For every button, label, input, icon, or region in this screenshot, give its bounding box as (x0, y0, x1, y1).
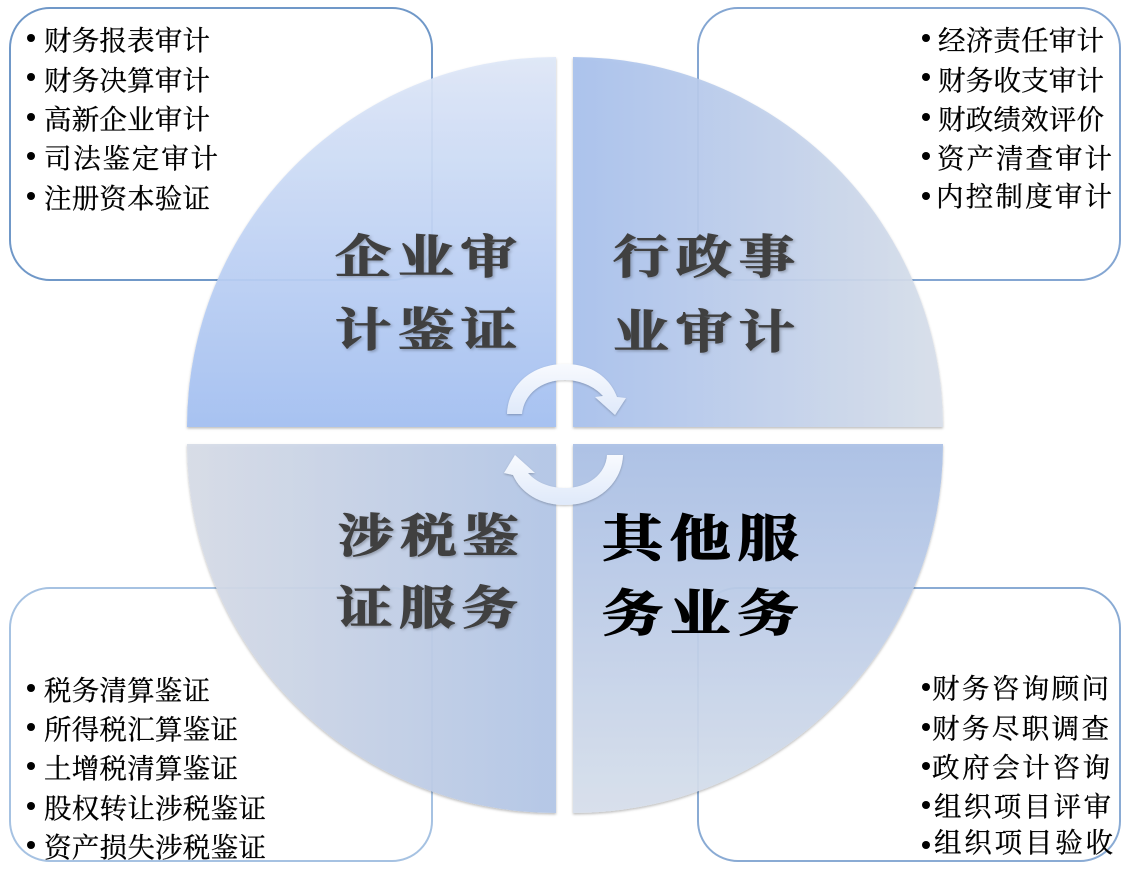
panel: bottom-right list: 财务尽职调查 (932, 713, 1109, 744)
sector: top-left (187, 57, 556, 427)
panel: top-left list: 司法鉴定审计 (44, 143, 218, 174)
panel: top-right list: 财务收支审计 (938, 65, 1104, 96)
heading: bottom-right: 务业务 (602, 587, 798, 643)
panel: top-right list: 内控制度审计 (936, 181, 1112, 212)
panel: top-left list: 财务决算审计 (44, 65, 210, 96)
panel: bottom-left list: 资产损失涉税鉴证 (44, 832, 266, 863)
panel: top-left list: 注册资本验证 (44, 183, 210, 214)
sector: bottom-right (573, 444, 943, 813)
heading: top-left: 计鉴证 (335, 306, 517, 357)
panel: top-left list: 财务报表审计 (44, 25, 210, 56)
heading: top-right: 行政事 (613, 233, 795, 284)
heading: top-right (613, 233, 795, 359)
panel: top-right list: 经济责任审计 (938, 25, 1104, 56)
panel: bottom-left list: 股权转让涉税鉴证 (44, 793, 266, 824)
panel: bottom-left list: 所得税汇算鉴证 (44, 714, 238, 745)
heading: top-left: 企业审 (335, 233, 517, 284)
panel: bottom-right list: 组织项目验收 (934, 827, 1113, 858)
heading: bottom-left (336, 512, 519, 635)
heading: top-right: 业审计 (613, 308, 795, 359)
heading: bottom-right: 其他服 (602, 512, 799, 568)
panel: bottom-left list: 土增税清算鉴证 (44, 753, 238, 784)
sector: top-right (573, 57, 943, 427)
sector: bottom-left (187, 444, 556, 813)
heading: top-left (335, 233, 517, 357)
panel: bottom-right list: 财务咨询顾问 (932, 673, 1109, 704)
panel: top-right list (698, 8, 1120, 280)
heading: bottom-left: 证服务 (336, 584, 518, 635)
heading: bottom-left: 涉税鉴 (338, 512, 519, 563)
panel: bottom-right list: 政府会计咨询 (932, 752, 1110, 783)
panel: bottom-left list: 税务清算鉴证 (44, 675, 210, 706)
panel: top-left list (10, 8, 432, 280)
panel: top-left list: 高新企业审计 (44, 104, 210, 135)
arrow: top clockwise (507, 364, 626, 415)
panel: bottom-right list (698, 588, 1120, 861)
panel: top-right list: 资产清查审计 (937, 143, 1112, 174)
heading: bottom-right (602, 512, 799, 643)
arrow: bottom clockwise (504, 455, 623, 505)
panel: bottom-left list (10, 588, 432, 863)
panel: top-right list: 财政绩效评价 (938, 104, 1104, 135)
panel: bottom-right list: 组织项目评审 (934, 791, 1111, 822)
